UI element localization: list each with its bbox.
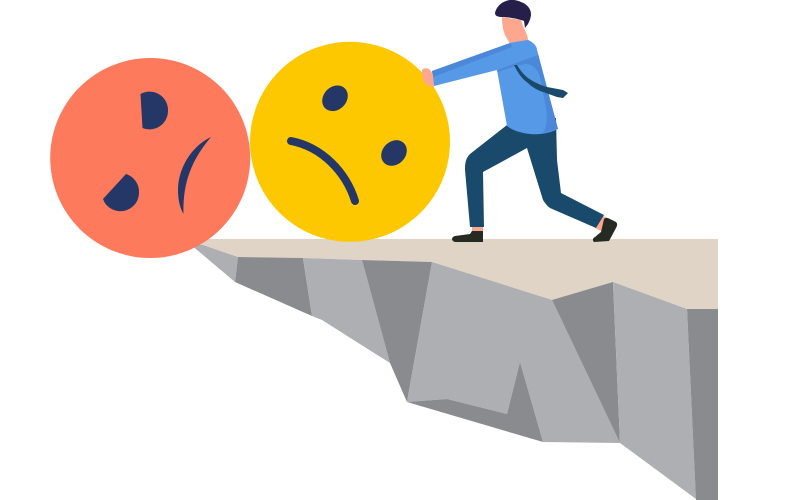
trousers (465, 118, 604, 228)
yellow sad face ball (250, 42, 450, 242)
hair (495, 0, 531, 28)
right eye (103, 174, 139, 211)
front ankle skin (472, 225, 483, 233)
mouth (291, 141, 355, 201)
rear ankle skin (595, 216, 609, 231)
shirt torso (497, 40, 558, 134)
cliff (190, 239, 718, 500)
left eye (317, 80, 353, 116)
right eye (376, 135, 412, 171)
left eye (140, 92, 168, 129)
rear shoe (593, 218, 617, 242)
businessman pushing (422, 0, 617, 242)
tie (514, 65, 568, 98)
mouth (178, 137, 211, 214)
arm underside shading (497, 55, 538, 72)
hand (422, 68, 434, 87)
neck and face (502, 17, 529, 44)
cliff top surface (190, 239, 718, 309)
red angry face ball (50, 58, 250, 258)
front shoe (452, 231, 483, 242)
shirt side shading (515, 50, 558, 133)
arm shading (432, 43, 512, 77)
pushing arm (432, 40, 538, 86)
rock faces (190, 244, 718, 500)
